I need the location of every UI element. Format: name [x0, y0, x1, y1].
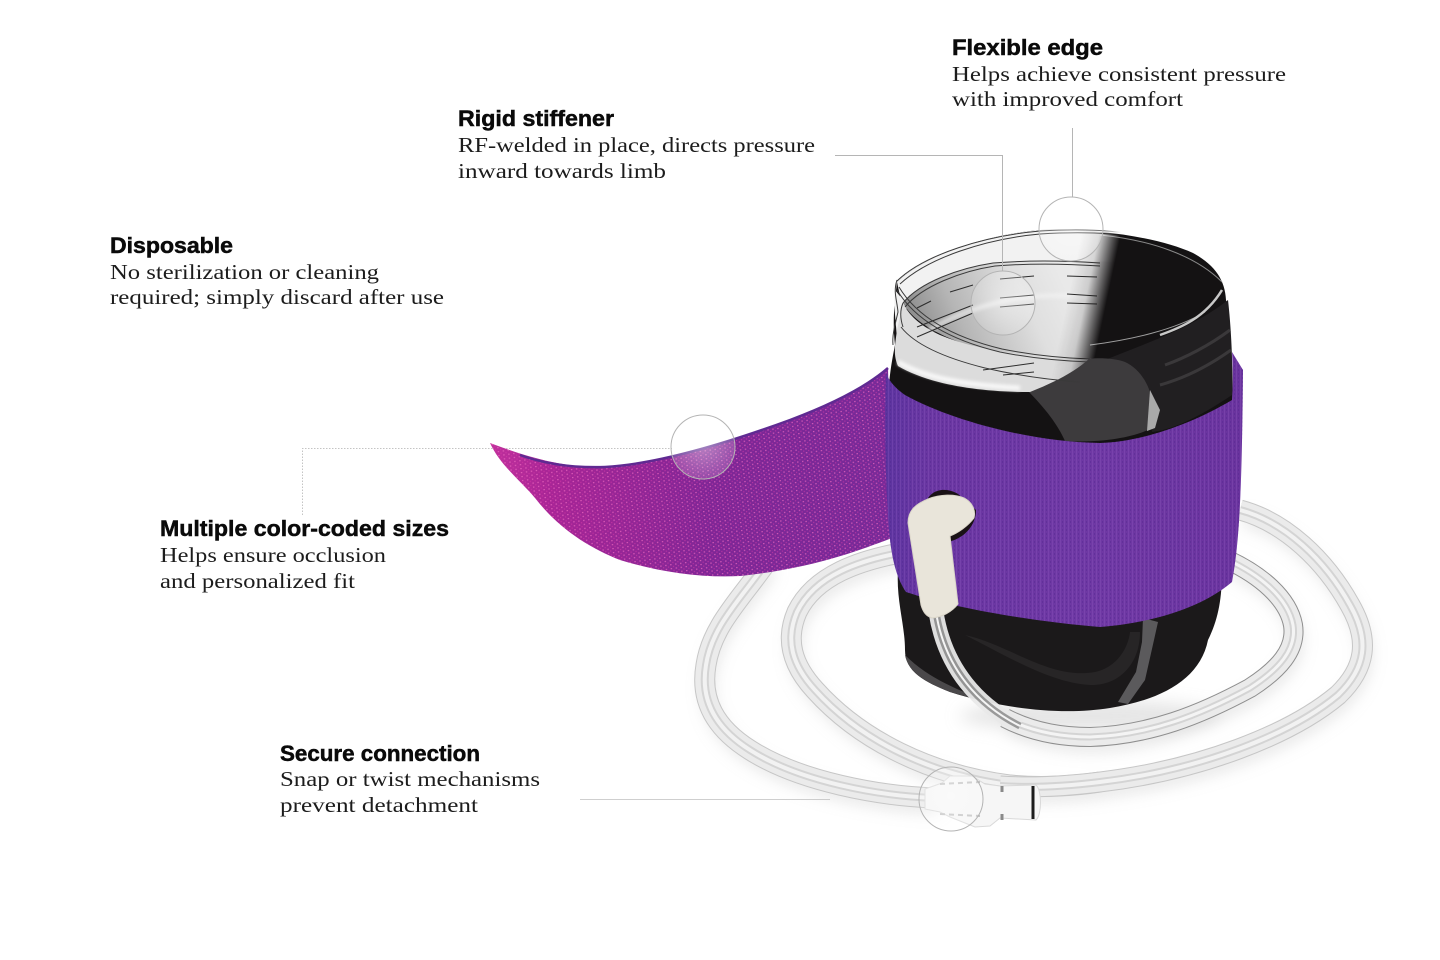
lens: rigid stiffener: [971, 271, 1035, 335]
upper lip: [894, 291, 904, 334]
leader lines over product: [835, 128, 1072, 271]
soft floor shadow: [708, 519, 1366, 807]
upper cuff with fade from transparent to black: [890, 229, 1233, 443]
silver strip: [1147, 390, 1160, 431]
front lip: [895, 303, 1090, 392]
label: secure connection: [280, 741, 540, 817]
lens callouts: [671, 197, 1103, 831]
quick connector: [925, 776, 1040, 827]
back wall: [897, 230, 1130, 310]
lens: color-coded strap: [671, 415, 735, 479]
label: rigid stiffener: RF-welded in place, directs pressure: [458, 133, 815, 157]
cream elbow connector: [908, 495, 975, 618]
lens: flexible edge: [1039, 197, 1103, 261]
label: disposable: Disposable: [110, 233, 233, 258]
label: multiple color-coded sizes: Multiple color-coded sizes: [160, 516, 449, 541]
label: multiple color-coded sizes: and personalized fit: [160, 569, 355, 593]
band slot: [928, 490, 976, 542]
black silhouette: [888, 230, 1233, 470]
tubing loops: [705, 510, 1362, 798]
label: flexible edge: [952, 35, 1286, 111]
label: disposable: No sterilization or cleaning: [110, 260, 380, 284]
label: rigid stiffener: inward towards limb: [458, 159, 666, 183]
label: rigid stiffener: Rigid stiffener: [458, 106, 614, 131]
inner tube loop: [791, 552, 1100, 786]
front tube over cuff: [936, 560, 1294, 737]
taper toward elbow: [936, 612, 1020, 726]
label: multiple color-coded sizes: [160, 516, 449, 593]
clear stiffener strip: [1118, 618, 1158, 704]
label: disposable: required; simply discard after use: [110, 285, 444, 309]
inner wall: [904, 261, 1112, 359]
lower cuff body: [898, 570, 1222, 711]
arc highlight: [926, 296, 1044, 332]
label: multiple color-coded sizes: Helps ensure occlusion: [160, 543, 387, 567]
rim outlines: [892, 229, 1120, 380]
outer tube loop: [705, 510, 1362, 798]
label: secure connection: Secure connection: [280, 741, 480, 766]
leader lines behind product: [302, 448, 830, 800]
label: flexible edge: Flexible edge: [952, 35, 1103, 60]
right side folds on black: [1100, 300, 1232, 432]
purple band: [885, 352, 1243, 627]
strap tail with hook fabric: [490, 368, 892, 576]
stiffener dashes: [917, 276, 1097, 375]
lens: secure connection: [919, 767, 983, 831]
label: secure connection: Snap or twist mechanisms: [280, 767, 540, 791]
label: flexible edge: with improved comfort: [952, 87, 1183, 111]
translucent left side: [892, 229, 1120, 393]
label: flexible edge: Helps achieve consistent pressure: [952, 62, 1286, 86]
grey pleat: [1027, 358, 1150, 441]
label: rigid stiffener: [458, 106, 815, 183]
label: disposable: [110, 233, 444, 309]
label: secure connection: prevent detachment: [280, 793, 478, 817]
